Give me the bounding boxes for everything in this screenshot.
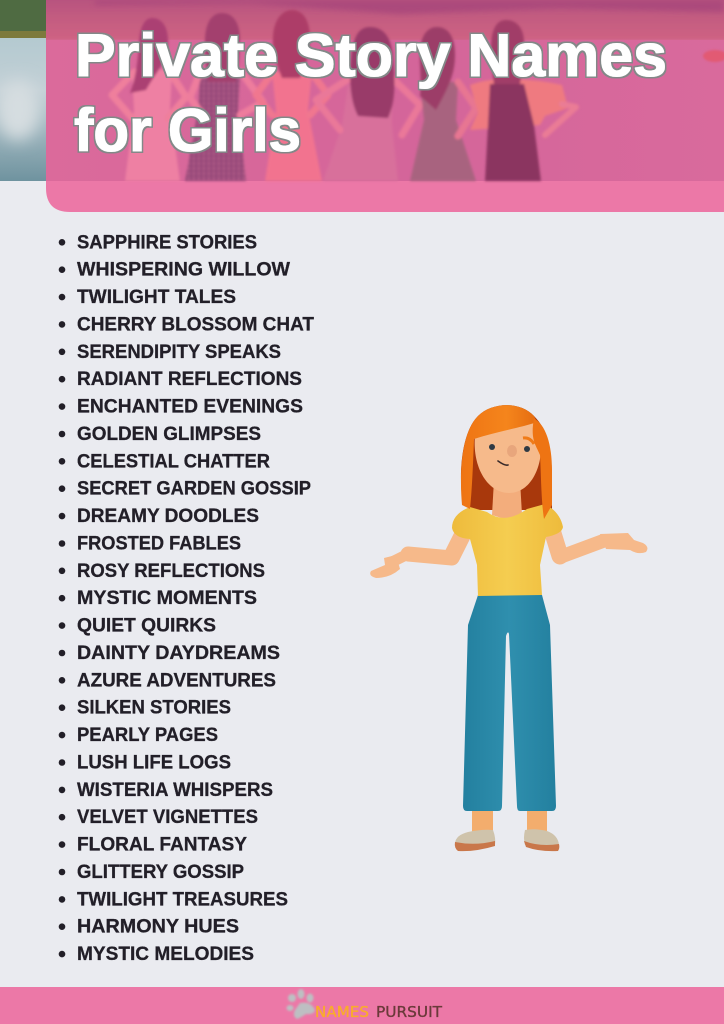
name 2: WHISPERING WILLOW — [77, 259, 291, 281]
front hair — [461, 405, 552, 519]
name 22: VELVET VIGNETTES — [77, 806, 258, 828]
girl 4 — [316, 27, 420, 181]
tinted photo background — [40, 0, 724, 181]
neck — [492, 480, 522, 520]
name 24: GLITTERY GOSSIP — [77, 861, 244, 883]
name 18: SILKEN STORIES — [77, 697, 231, 719]
girl 5 — [410, 27, 476, 181]
icon: paw — [286, 989, 315, 1019]
brand name: PURSUIT — [376, 1003, 443, 1021]
name 19: PEARLY PAGES — [77, 724, 218, 746]
title: Private Story Names — [75, 22, 667, 89]
name 7: ENCHANTED EVENINGS — [77, 396, 303, 418]
left arm — [370, 530, 465, 578]
name 9: CELESTIAL CHATTER — [77, 450, 270, 472]
name 21: WISTERIA WHISPERS — [77, 779, 273, 801]
name 27: MYSTIC MELODIES — [77, 943, 254, 965]
name 6: RADIANT REFLECTIONS — [77, 368, 302, 390]
face — [475, 420, 541, 493]
name 17: AZURE ADVENTURES — [77, 669, 276, 691]
name 12: FROSTED FABLES — [77, 533, 241, 555]
list of private story names — [59, 231, 314, 965]
right arm — [552, 530, 647, 557]
yellow shirt — [452, 504, 563, 596]
background photo strip — [0, 0, 46, 181]
title — [74, 22, 667, 164]
name 23: FLORAL FANTASY — [77, 834, 247, 856]
girl 1 — [112, 18, 186, 181]
name 8: GOLDEN GLIMPSES — [77, 423, 261, 445]
footer band — [0, 987, 724, 1024]
name 13: ROSY REFLECTIONS — [77, 560, 265, 582]
brand name: NAMES — [315, 1003, 369, 1021]
name 20: LUSH LIFE LOGS — [77, 752, 231, 774]
name 14: MYSTIC MOMENTS — [77, 587, 257, 609]
name 1: SAPPHIRE STORIES — [77, 231, 257, 253]
right leg ankle and shoe — [524, 805, 559, 851]
name 5: SERENDIPITY SPEAKS — [77, 341, 281, 363]
3D girl character shrugging — [370, 405, 647, 851]
brand name — [315, 1003, 443, 1021]
left leg ankle and shoe — [455, 805, 495, 851]
name 16: DAINTY DAYDREAMS — [77, 642, 280, 664]
header panel with group photo — [40, 0, 724, 212]
name 10: SECRET GARDEN GOSSIP — [77, 478, 311, 500]
girl 2 — [185, 13, 263, 181]
name 15: QUIET QUIRKS — [77, 615, 216, 637]
name 3: TWILIGHT TALES — [77, 286, 236, 308]
girl 6 — [470, 20, 576, 181]
girl 3 — [256, 10, 328, 181]
title: for Girls — [74, 97, 301, 164]
back hair — [461, 405, 552, 510]
name 4: CHERRY BLOSSOM CHAT — [77, 313, 314, 335]
logo — [286, 989, 443, 1021]
trousers — [463, 595, 556, 811]
name 11: DREAMY DOODLES — [77, 505, 259, 527]
name 25: TWILIGHT TREASURES — [77, 888, 288, 910]
six girls seen from behind — [112, 10, 576, 181]
face details — [489, 438, 534, 465]
name 26: HARMONY HUES — [77, 916, 239, 938]
